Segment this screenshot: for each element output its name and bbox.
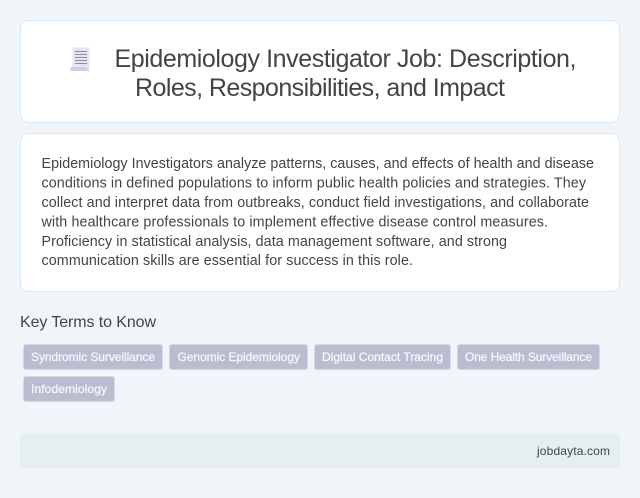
text block: description: conditions in defined populations to inform public health policies and strategies. They bbox=[42, 176, 587, 192]
footer bbox=[20, 434, 620, 468]
title: Roles, Responsibilities, and Impact bbox=[135, 74, 505, 102]
text block: description bbox=[40, 156, 594, 269]
chip: Infodemiology: Infodemiology bbox=[31, 382, 107, 396]
chip: Genomic Epidemiology: Genomic Epidemiology bbox=[178, 350, 300, 364]
footer: site name: jobdayta.com bbox=[536, 444, 610, 458]
chips: key terms bbox=[24, 344, 600, 402]
icon: document scroll bbox=[70, 48, 90, 71]
chip: Syndromic Surveillance bbox=[24, 344, 162, 370]
chip: Syndromic Surveillance: Syndromic Surveillance bbox=[31, 350, 155, 364]
text block: description: with healthcare professionals to implement effective disease control measures. bbox=[40, 214, 548, 230]
text block: description: Proficiency in statistical analysis, data management software, and strong bbox=[42, 234, 507, 250]
chip: Genomic Epidemiology bbox=[170, 344, 308, 370]
panel: title card bbox=[20, 20, 620, 122]
chip: Digital Contact Tracing bbox=[314, 344, 450, 370]
text block: description: collect and interpret data from outbreaks, conduct field investigations, and collaborate bbox=[42, 195, 589, 211]
title bbox=[114, 45, 576, 102]
chip: Infodemiology bbox=[24, 376, 114, 402]
title: Epidemiology Investigator Job: Description, bbox=[114, 45, 576, 73]
chip: One Health Surveillance bbox=[458, 344, 600, 370]
chip: Digital Contact Tracing: Digital Contact Tracing bbox=[322, 350, 443, 364]
heading: key terms: Key Terms to Know bbox=[20, 314, 156, 331]
chip: One Health Surveillance: One Health Surveillance bbox=[465, 350, 592, 364]
panel: description bbox=[20, 134, 620, 292]
text block: description: Epidemiology Investigators analyze patterns, causes, and effects of health and disease bbox=[42, 156, 594, 172]
text block: description: communication skills are essential for success in this role. bbox=[42, 253, 413, 269]
